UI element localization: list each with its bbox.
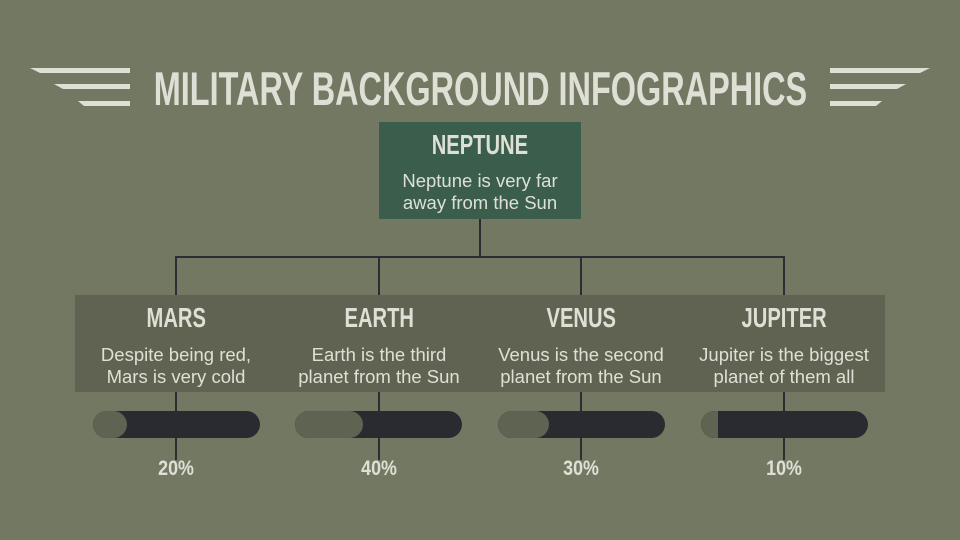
panel: neptune	[379, 122, 581, 219]
bar: jupiter 10%	[701, 411, 868, 438]
percent: 20%: 20%	[158, 457, 194, 480]
panel: venus: VENUS	[546, 302, 616, 333]
panel: venus: Venus is the second	[498, 344, 664, 365]
panel: neptune: NEPTUNE	[432, 129, 528, 160]
panel: mars: MARS	[146, 302, 206, 333]
panel: neptune: Neptune is very far	[402, 170, 558, 191]
panel: neptune: away from the Sun	[403, 192, 557, 213]
panel: venus	[498, 302, 664, 387]
icon: right wings	[830, 68, 930, 106]
panel: earth: EARTH	[344, 302, 414, 333]
percent: 30%: 30%	[563, 457, 599, 480]
panel: mars: Mars is very cold	[107, 366, 245, 387]
bar: mars 20%	[93, 411, 260, 438]
panel: mars: Despite being red,	[101, 344, 251, 365]
bar: earth 40%	[295, 411, 462, 438]
percent: 40%: 40%	[361, 457, 397, 480]
bar: venus 30%	[498, 411, 665, 438]
panel: jupiter: Jupiter is the biggest	[699, 344, 869, 365]
panel: earth	[298, 302, 460, 387]
panel: jupiter	[699, 302, 869, 387]
band panel	[75, 295, 885, 392]
panel: jupiter: planet of them all	[714, 366, 854, 387]
panel: mars	[101, 302, 251, 387]
panel: earth: planet from the Sun	[298, 366, 460, 387]
panel: earth: Earth is the third	[312, 344, 446, 365]
percent: 10%: 10%	[766, 457, 802, 480]
panel: jupiter: JUPITER	[741, 302, 827, 333]
title: MILITARY BACKGROUND INFOGRAPHICS	[153, 62, 807, 115]
panel: venus: planet from the Sun	[500, 366, 662, 387]
icon: left wings	[30, 68, 130, 106]
